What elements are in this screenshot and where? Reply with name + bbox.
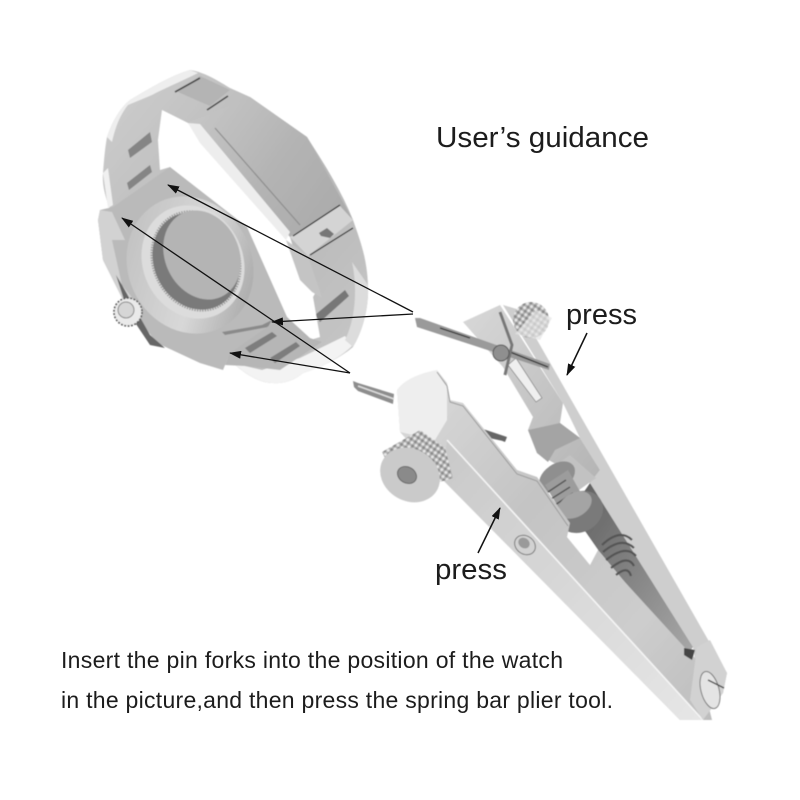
coil spring [602, 535, 636, 576]
white opening inside bracelet [158, 110, 320, 340]
adjusting screw and mushroom pin [533, 455, 611, 541]
upper knurled knob [513, 302, 552, 340]
interior of tool [567, 483, 693, 655]
caseback [104, 175, 276, 355]
rivet [511, 531, 539, 559]
instruction text: Insert the pin forks into the position of the watch [61, 647, 563, 673]
title: User’s guidance [436, 122, 649, 154]
watch case [98, 167, 287, 370]
bracelet [103, 70, 368, 383]
lower arm [397, 370, 712, 720]
lower knurled knob [370, 430, 453, 513]
instruction text: in the picture,and then press the spring bar plier tool. [61, 687, 613, 713]
lower pin fork [353, 381, 507, 442]
watch illustration [98, 70, 368, 383]
arrow: press upper [567, 333, 587, 375]
label: press upper: press [566, 299, 637, 331]
clasp [188, 97, 353, 298]
tip and tail screw [684, 640, 727, 720]
label: press lower: press [435, 554, 507, 586]
crown [114, 298, 142, 326]
upper pin fork [415, 312, 550, 375]
instruction text [61, 647, 613, 713]
arrow: press lower [478, 508, 500, 553]
spring bar plier tool [353, 302, 727, 720]
lower bracelet links [225, 317, 322, 370]
pointer arrows to lug holes [122, 185, 413, 373]
upper arm [463, 305, 727, 720]
